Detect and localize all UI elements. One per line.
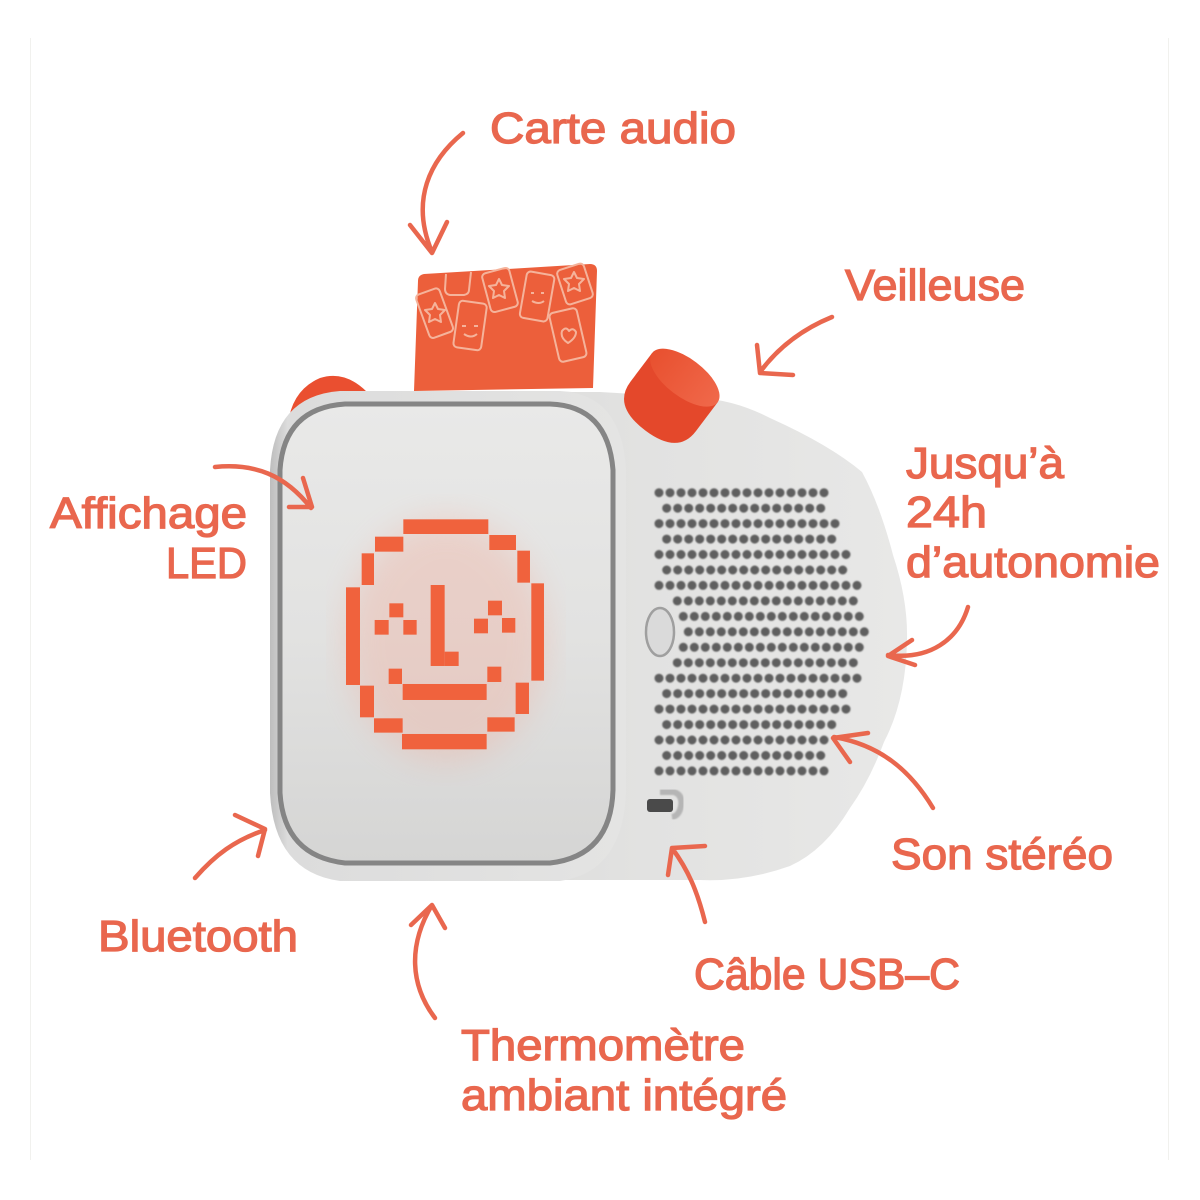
label: Bluetooth: Bluetooth: [98, 912, 298, 961]
label: autonomy: d’autonomie: [906, 538, 1160, 587]
label: LED display: LED: [166, 539, 247, 588]
arrow: LED display: [215, 466, 312, 508]
label: thermometer: ambiant intégré: [461, 1071, 787, 1120]
arrow: thermometer: [411, 905, 445, 1018]
arrow: Bluetooth: [195, 815, 265, 878]
audio card: [414, 263, 597, 391]
arrow: Son stéréo: [833, 733, 933, 808]
label: Veilleuse: Veilleuse: [845, 261, 1025, 310]
label: Câble USB-C: Câble USB–C: [694, 950, 960, 999]
front bezel: [270, 391, 626, 881]
label: LED display: Affichage: [50, 489, 247, 538]
arrow: Veilleuse: [757, 317, 832, 375]
arrow: autonomy: [888, 607, 968, 665]
label: Son stéréo: Son stéréo: [891, 830, 1113, 879]
label: LED display: [50, 489, 247, 588]
label: thermometer: Thermomètre: [461, 1021, 745, 1070]
label: Carte audio: Carte audio: [490, 104, 736, 153]
right knob: [612, 338, 729, 455]
label: autonomy: Jusqu’à: [906, 439, 1065, 488]
USB-C port: [647, 792, 681, 817]
label: autonomy: [906, 439, 1160, 587]
arrow: Câble USB-C: [668, 846, 705, 922]
speaker body: [380, 392, 907, 880]
speaker grille: [659, 493, 870, 771]
label: thermometer: [461, 1021, 787, 1120]
label: autonomy: 24h: [906, 488, 987, 537]
LED smiley face: [346, 518, 546, 762]
side button: [646, 608, 674, 656]
base line: [365, 881, 730, 883]
arrow: Carte audio: [410, 133, 463, 253]
front ring: [280, 404, 613, 863]
left knob: [288, 376, 367, 424]
